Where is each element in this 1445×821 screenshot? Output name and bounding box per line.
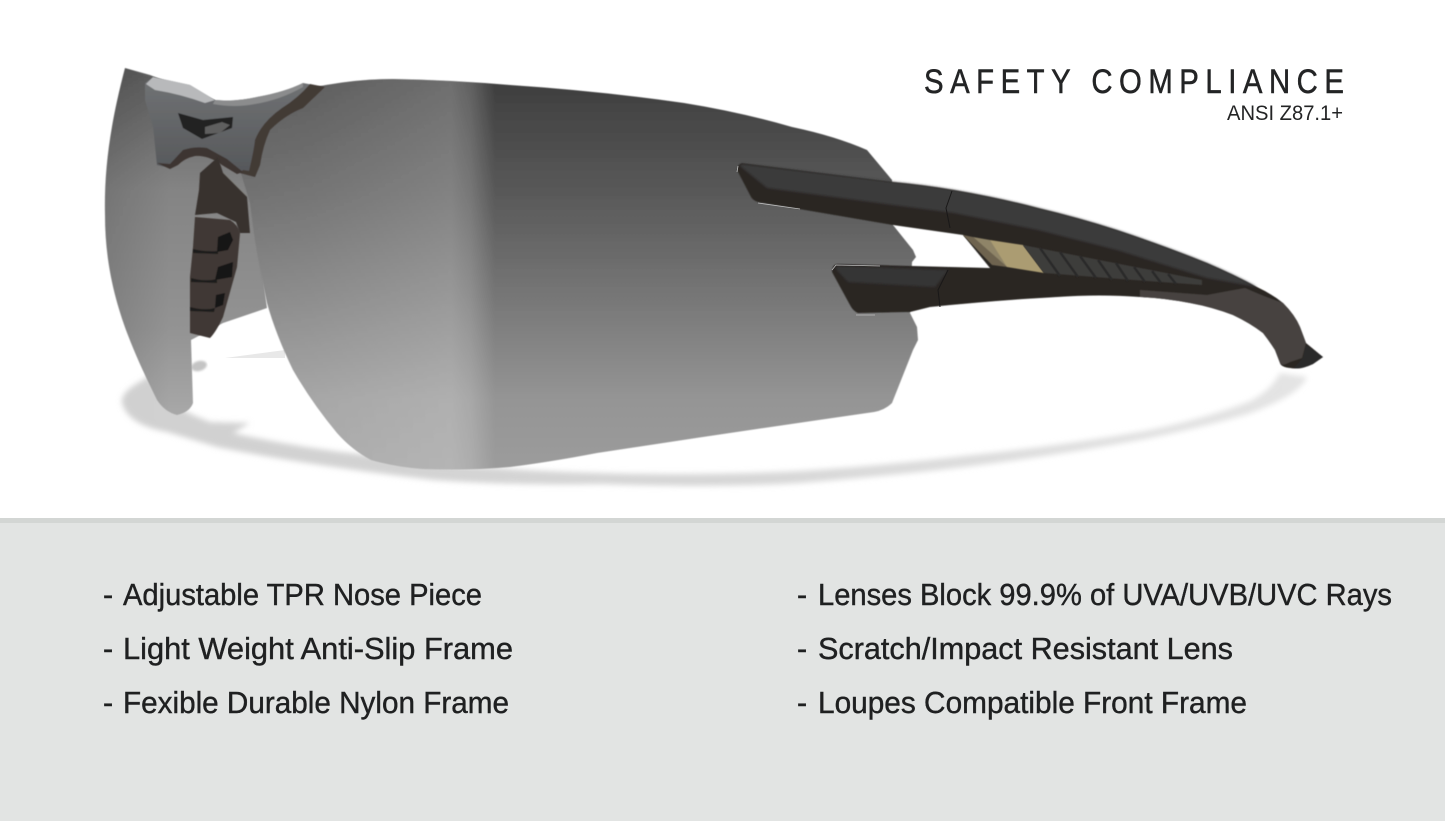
right feature list: Scratch/Impact Resistant Lens [818,632,1233,666]
left feature list: Adjustable TPR Nose Piece [123,578,482,612]
left feature list: - [103,578,113,612]
right feature list [797,578,1392,720]
main lens [240,79,918,470]
arm: lower highlight [835,266,948,287]
arm: frame silhouette [737,163,1323,368]
right feature list: - [797,578,807,612]
right feature list: Lenses Block 99.9% of UVA/UVB/UVC Rays [818,578,1392,612]
ground shadow [122,350,1307,486]
arm: upper highlight [740,164,1257,287]
nose bridge frame [145,77,325,177]
right feature list: - [797,632,807,666]
heading: safety compliance [924,62,1344,125]
arm: end cap [1294,345,1323,368]
left feature list: Light Weight Anti-Slip Frame [123,632,513,666]
left feature list [103,578,513,720]
left feature list: - [103,686,113,720]
nose piece [190,157,250,338]
right feature list: - [797,686,807,720]
bridge vent [178,113,233,139]
arm: hinge seams [938,191,952,307]
product image: safety glasses [105,68,1323,486]
left feature list: Fexible Durable Nylon Frame [123,686,509,720]
arm: gold insert [963,235,1044,273]
heading: safety compliance: SAFETY COMPLIANCE [924,62,1344,101]
standard label: ANSI Z87.1+ [1227,102,1343,125]
feature panel [0,518,1445,821]
arm: ribbed grip [1023,245,1202,285]
arm: lighter tip [1140,288,1306,365]
left lens [105,68,267,415]
right feature list: Loupes Compatible Front Frame [818,686,1247,720]
left feature list: - [103,632,113,666]
